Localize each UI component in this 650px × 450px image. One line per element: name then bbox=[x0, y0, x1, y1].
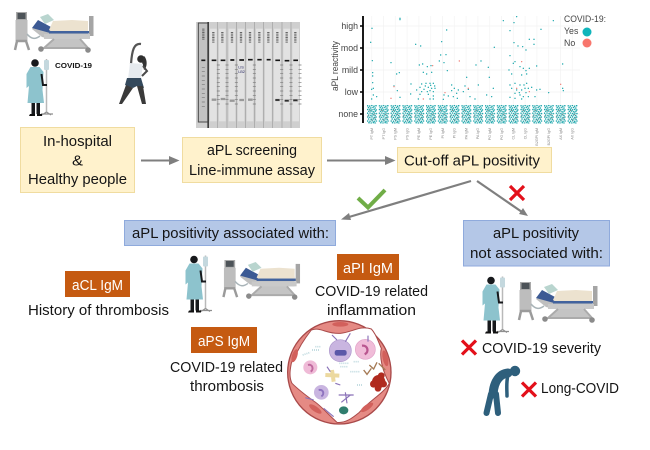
x axis labels: PS IgM bbox=[394, 128, 398, 140]
y axis bbox=[362, 16, 364, 123]
image: line-immune assay strips: LB2 bbox=[238, 70, 245, 74]
icon: patient with IV stand bbox=[482, 276, 509, 334]
arrow: to screening bbox=[141, 158, 177, 164]
item: COVID-19 severity with red cross: COVID-19 severity bbox=[482, 341, 602, 357]
icons: ventilator and hospital bed bbox=[519, 282, 598, 323]
box: In-hospital and healthy people: Healthy people bbox=[28, 172, 127, 188]
icon: hunched person bbox=[486, 366, 520, 413]
x axis labels: PT IgM bbox=[370, 128, 374, 140]
x axis labels: B2GPI IgG bbox=[547, 128, 551, 145]
x axis labels: CL IgG bbox=[523, 128, 527, 139]
icon: green check mark bbox=[358, 190, 385, 208]
x axis labels: AX IgM bbox=[559, 128, 563, 140]
x axis labels bbox=[370, 128, 575, 146]
clot bbox=[370, 372, 387, 392]
arrow: to cut-off bbox=[327, 158, 393, 164]
box: aPL positivity associated with: aPL positivity associated with: bbox=[132, 226, 329, 242]
x axis labels: CL IgM bbox=[512, 128, 516, 139]
strip set bbox=[210, 29, 299, 121]
box: In-hospital and healthy people: & bbox=[72, 154, 83, 170]
tag: aPI IgM: aPI IgM bbox=[343, 261, 393, 277]
immune cells bbox=[329, 340, 351, 362]
icon: red cross bbox=[510, 186, 524, 200]
box: Cut-off aPL positivity: Cut-off aPL positivity bbox=[404, 154, 541, 170]
tag: aCL IgM bbox=[65, 271, 130, 297]
x axis labels: PG IgG bbox=[500, 128, 504, 140]
arrow: to associated bbox=[341, 181, 471, 220]
x axis labels: PA IgG bbox=[476, 128, 480, 139]
y axis title: aPL reactivity bbox=[330, 40, 340, 91]
text: COVID-19 related thrombosis: COVID-19 related bbox=[170, 360, 283, 376]
x axis labels: PE IgG bbox=[429, 128, 433, 140]
image: line-immune assay strips: LIS bbox=[238, 66, 244, 70]
icon: patient with IV stand bbox=[26, 59, 53, 116]
text: COVID-19 related thrombosis bbox=[170, 360, 283, 395]
y axis labels: low bbox=[345, 87, 359, 97]
illustration: blood vessel cross-section with cells bbox=[288, 321, 391, 424]
text: history of thrombosis: History of thrombosis bbox=[28, 303, 169, 319]
box: Cut-off aPL positivity bbox=[398, 148, 552, 172]
text: COVID-19 related thrombosis: thrombosis bbox=[190, 379, 264, 395]
x axis labels: PI IgG bbox=[453, 128, 457, 138]
text: COVID-19 related inflammation bbox=[315, 284, 428, 319]
y axis labels: high bbox=[341, 21, 358, 31]
text: COVID-19 related inflammation: inflammation bbox=[327, 303, 416, 319]
icons: ventilator and hospital bed (in-hospital) bbox=[15, 12, 94, 53]
legend: COVID-19 bbox=[564, 14, 606, 48]
x axis labels: PT IgG bbox=[382, 128, 386, 139]
x axis labels: PA IgM bbox=[464, 128, 468, 139]
box: aPL screening: Line-immune assay bbox=[189, 163, 316, 179]
tag: aCL IgM: aCL IgM bbox=[72, 278, 123, 294]
tag: aPS IgM: aPS IgM bbox=[198, 334, 250, 350]
item: Long-COVID with red cross: Long-COVID bbox=[541, 381, 619, 397]
tag: aPS IgM bbox=[191, 327, 257, 353]
label: COVID-19: COVID-19 bbox=[55, 61, 92, 70]
box: aPL positivity associated with bbox=[124, 220, 336, 246]
box: In-hospital and healthy people: In-hospital bbox=[43, 134, 112, 150]
text: COVID-19 related inflammation: COVID-19 related bbox=[315, 284, 428, 300]
y axis labels: none bbox=[338, 109, 358, 119]
box: aPL positivity not associated with: not associated with: bbox=[470, 246, 603, 262]
chart: aPL reactivity scatter plot bbox=[330, 16, 580, 146]
icon: patient with IV stand bbox=[186, 256, 212, 312]
legend: COVID-19: No bbox=[564, 38, 575, 48]
x axis labels: B2GPI IgM bbox=[535, 128, 539, 146]
box: aPL screening: aPL screening bbox=[207, 143, 297, 159]
box: aPL positivity not associated with bbox=[464, 220, 610, 266]
legend: COVID-19: COVID-19: bbox=[564, 14, 606, 24]
x axis labels: PE IgM bbox=[417, 128, 421, 140]
box: aPL screening bbox=[182, 138, 322, 182]
x axis labels: PS IgG bbox=[405, 128, 409, 140]
icon: healthy person stretching bbox=[119, 44, 147, 104]
x axis labels: PG IgM bbox=[488, 128, 492, 140]
arrow: to not associated bbox=[477, 181, 528, 216]
platelets and antibodies bbox=[325, 370, 339, 382]
x axis labels: AX IgG bbox=[571, 128, 575, 140]
tag: aPI IgM bbox=[337, 254, 399, 280]
image: line-immune assay strips bbox=[196, 22, 300, 128]
y axis labels: mild bbox=[342, 65, 358, 75]
y axis labels: mod bbox=[341, 43, 358, 53]
icons: ventilator and hospital bed bbox=[223, 260, 300, 300]
box: aPL positivity not associated with: aPL positivity bbox=[493, 226, 580, 242]
y axis labels bbox=[338, 21, 359, 119]
box: In-hospital and healthy people bbox=[20, 128, 134, 192]
legend: COVID-19: Yes bbox=[564, 26, 579, 36]
x axis labels: PI IgM bbox=[441, 128, 445, 138]
